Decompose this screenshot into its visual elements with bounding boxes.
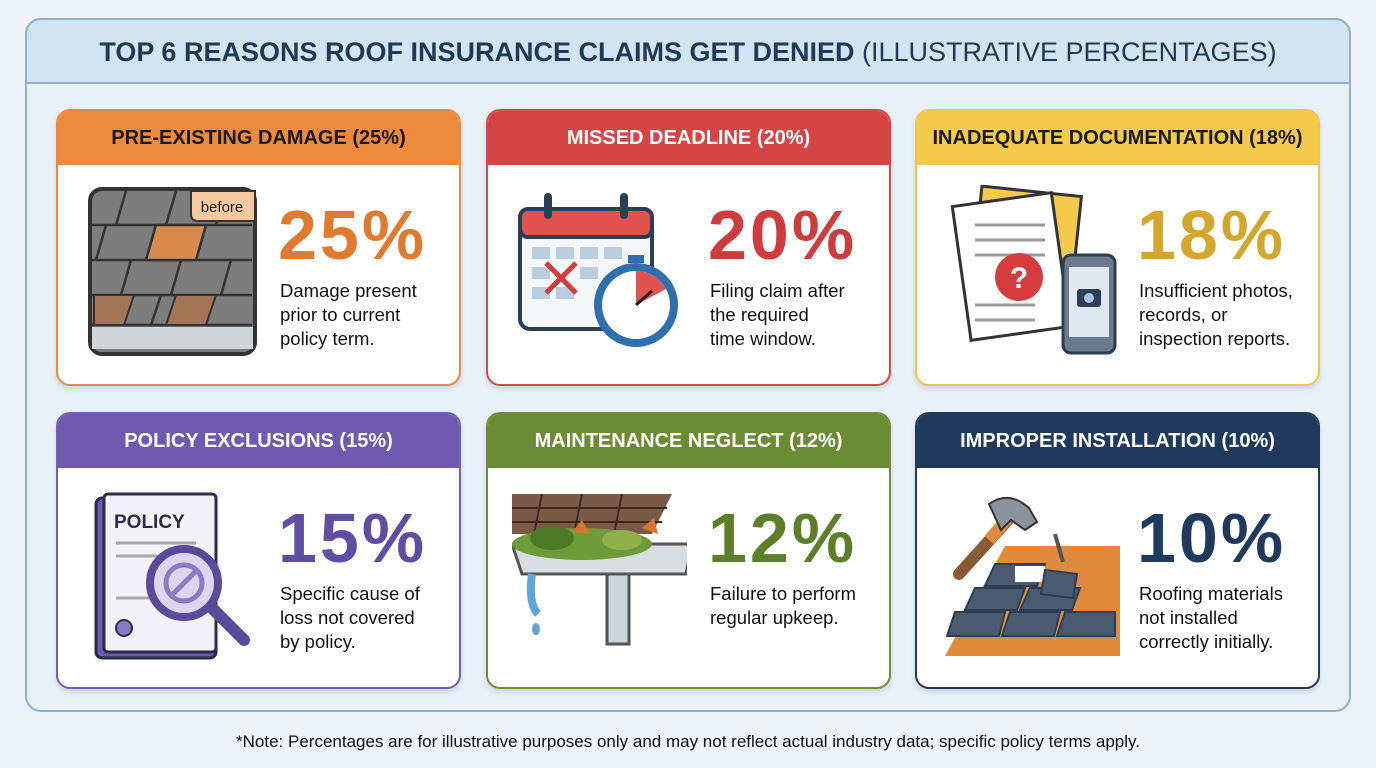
text: description: Filing claim after	[710, 280, 845, 301]
text: description: Insufficient photos,	[1139, 280, 1293, 301]
text: description: time window.	[710, 328, 816, 349]
text: description: by policy.	[280, 631, 356, 652]
text: description: prior to current	[280, 304, 400, 325]
panel: policy exclusions	[56, 412, 461, 689]
stat: 15%: 15%	[278, 499, 427, 577]
header: maintenance neglect: MAINTENANCE NEGLECT (12%)	[535, 430, 842, 452]
icon: policy with magnifier: POLICY	[114, 512, 185, 533]
panel: improper installation	[915, 412, 1320, 689]
stat: 10%: 10%	[1137, 499, 1286, 577]
title	[25, 18, 1351, 84]
text: description: policy term.	[280, 328, 375, 349]
text: description: inspection reports.	[1139, 328, 1290, 349]
header: inadequate documentation	[917, 111, 1318, 165]
header: improper installation	[917, 414, 1318, 468]
header: maintenance neglect	[488, 414, 889, 468]
text: description: Roofing materials	[1139, 583, 1283, 604]
header: pre-existing damage	[58, 111, 459, 165]
icon: hammer and roof	[945, 496, 1120, 656]
icon: documents and phone: ?	[1010, 262, 1028, 295]
text: description: correctly initially.	[1139, 631, 1273, 652]
stat: 12%: 12%	[708, 499, 857, 577]
header: missed deadline: MISSED DEADLINE (20%)	[567, 127, 810, 149]
header: pre-existing damage: PRE-EXISTING DAMAGE (25%)	[111, 127, 406, 149]
text: description	[280, 280, 417, 349]
panel: pre-existing damage	[56, 109, 461, 386]
text: description	[1139, 583, 1283, 652]
header: inadequate documentation: INADEQUATE DOCUMENTATION (18%)	[932, 127, 1302, 149]
text: description	[1139, 280, 1293, 349]
text: description: regular upkeep.	[710, 607, 839, 628]
text: description	[280, 583, 420, 652]
header: policy exclusions: POLICY EXCLUSIONS (15%)	[124, 430, 393, 452]
icon: damaged shingles: before	[201, 199, 243, 216]
stat: 25%: 25%	[278, 196, 427, 274]
text: description: records, or	[1139, 304, 1227, 325]
panel: inadequate documentation	[915, 109, 1320, 386]
text: description: the required	[710, 304, 809, 325]
title: TOP 6 REASONS ROOF INSURANCE CLAIMS GET DENIED (ILLUSTRATIVE PERCENTAGES)	[99, 37, 1277, 67]
panel: missed deadline	[486, 109, 891, 386]
icon: damaged shingles	[88, 187, 257, 356]
text: description: Failure to perform	[710, 583, 856, 604]
text: description: Specific cause of	[280, 583, 420, 604]
icon: calendar and stopwatch	[518, 193, 678, 347]
icon: policy with magnifier	[94, 492, 250, 660]
text: description: loss not covered	[280, 607, 415, 628]
text: description: Damage present	[280, 280, 417, 301]
header: improper installation: IMPROPER INSTALLATION (10%)	[960, 430, 1275, 452]
stat: 20%: 20%	[708, 196, 857, 274]
text: description	[710, 280, 845, 349]
header: policy exclusions	[58, 414, 459, 468]
panel: maintenance neglect	[486, 412, 891, 689]
icon: clogged gutter	[512, 494, 687, 646]
footnote: *Note: Percentages are for illustrative purposes only and may not reflect actual industry data; specific policy terms apply.	[236, 732, 1140, 751]
icon: documents and phone	[950, 185, 1116, 354]
header: missed deadline	[488, 111, 889, 165]
stat: 18%: 18%	[1137, 196, 1286, 274]
text: description: not installed	[1139, 607, 1238, 628]
text: description	[710, 583, 856, 628]
